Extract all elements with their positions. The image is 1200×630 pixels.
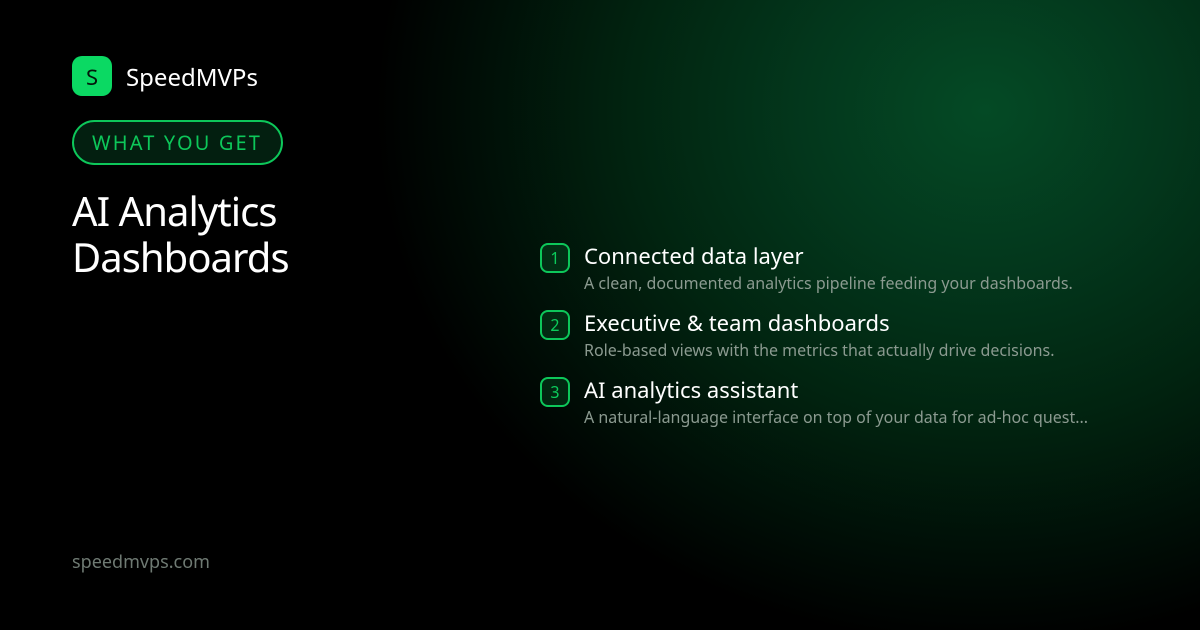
title [72, 183, 289, 284]
eyebrow pill: WHAT YOU GET [92, 129, 262, 156]
badge 2 [540, 310, 570, 340]
badge 3: 3 [550, 381, 560, 403]
item 2 description: Role-based views with the metrics that actually drive decisions. [584, 339, 1054, 361]
item 3 heading: AI analytics assistant [584, 375, 798, 405]
list item 3 [540, 375, 1088, 428]
logo mark [72, 56, 112, 96]
item 1 heading: Connected data layer [584, 241, 804, 271]
badge 2: 2 [550, 314, 560, 336]
list item 1 [540, 241, 1073, 294]
item 3 description: A natural-language interface on top of your data for ad-hoc quest... [584, 406, 1088, 428]
item 2 heading: Executive & team dashboards [584, 308, 890, 338]
title: Dashboards [72, 229, 289, 284]
footer url: speedmvps.com [72, 550, 210, 574]
item 1 description: A clean, documented analytics pipeline feeding your dashboards. [584, 272, 1073, 294]
title: AI Analytics [72, 183, 277, 238]
eyebrow pill [72, 120, 283, 165]
badge 1: 1 [550, 247, 560, 269]
list item 2 [540, 308, 1054, 361]
badge 1 [540, 243, 570, 273]
brand name: SpeedMVPs [126, 61, 258, 94]
badge 3 [540, 377, 570, 407]
logo mark: S [86, 62, 98, 92]
